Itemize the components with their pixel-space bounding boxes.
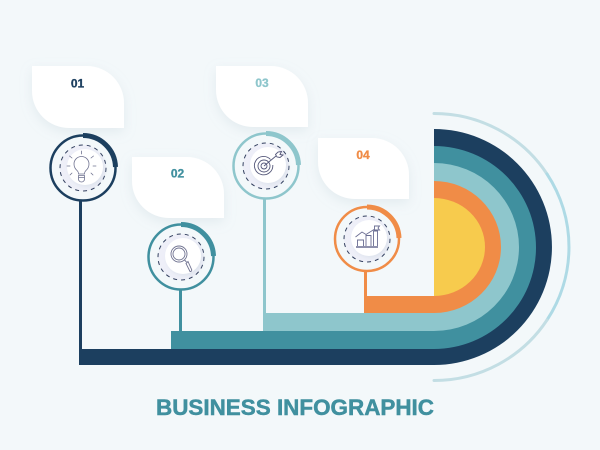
connector: step 4 xyxy=(364,270,367,297)
number 04: 04 xyxy=(356,148,370,162)
badge 4: growth chart xyxy=(335,207,399,271)
band: orange xyxy=(364,181,501,313)
connector: step 2 xyxy=(179,288,182,332)
icon: magnifier xyxy=(171,246,192,272)
card 1 xyxy=(32,66,124,128)
card 2 xyxy=(132,157,224,218)
number 01: 01 xyxy=(71,76,84,90)
badge 2: magnifier xyxy=(148,224,214,290)
stacked arc chart xyxy=(79,129,552,365)
card 3 xyxy=(216,66,308,127)
outer ring arc xyxy=(434,114,569,380)
number 03: 03 xyxy=(255,76,269,90)
connector: step 1 xyxy=(79,198,82,350)
core: yellow xyxy=(434,198,485,296)
title: BUSINESS INFOGRAPHIC xyxy=(156,395,434,420)
badge 3: target xyxy=(234,134,298,198)
connector: step 3 xyxy=(263,198,266,314)
band: navy xyxy=(79,129,552,365)
icon: bulb xyxy=(67,151,96,182)
band: teal xyxy=(171,146,536,349)
card 4 xyxy=(318,138,409,199)
icon: bars and flag xyxy=(356,226,380,247)
band: light teal xyxy=(263,163,519,331)
number 02: 02 xyxy=(171,166,184,180)
icon: target xyxy=(254,152,283,175)
badge 1: light bulb xyxy=(50,136,116,200)
